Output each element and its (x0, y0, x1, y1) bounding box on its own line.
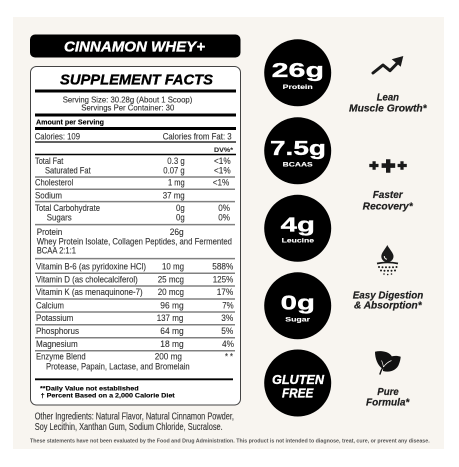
label: easy digestion and absorption: Easy Digestion (353, 290, 423, 301)
label: easy digestion and absorption: & Absorption* (354, 301, 423, 312)
vitamin D row: Vitamin D (as cholecalciferol) (36, 273, 138, 284)
potassium row (36, 312, 233, 323)
disclaimer: These statements have not been evaluated by the Food and Drug Administration. This product is not intended to diagnose, treat, cure, or prevent any disease. (30, 438, 430, 444)
label: easy digestion and absorption (353, 290, 423, 312)
potassium row: 137 mg (157, 312, 183, 323)
badge: 0g sugar: 0g (281, 291, 315, 314)
other ingredients: Other Ingredients: Natural Flavor, Natural Cinnamon Powder, (35, 411, 234, 422)
label: lean muscle growth (349, 93, 428, 114)
cholesterol row: Cholesterol (35, 177, 73, 188)
title bar (30, 34, 240, 58)
calcium row: Calcium (36, 300, 64, 311)
badge: 7.5g BCAAs: BCAAS (283, 162, 313, 169)
title bar: CINNAMON WHEY+ (64, 40, 205, 56)
badge: gluten free: FREE (282, 386, 314, 401)
calories row: Calories from Fat: 3 (163, 130, 232, 141)
fat rows: <1% (214, 155, 231, 166)
phosphorus row: 64 mg (160, 325, 184, 336)
vitamin B-6 row (36, 261, 233, 272)
phosphorus row: 5% (221, 325, 233, 336)
footnotes: † Percent Based on a 2,000 Calorie Diet (41, 392, 176, 399)
carbohydrate rows: Sugars (47, 212, 72, 223)
cholesterol row: 1 mg (168, 177, 185, 188)
label: pure formula: Pure (377, 387, 399, 398)
vitamin K row: Vitamin K (as menaquinone-7) (36, 286, 143, 297)
icon: water drop absorbing (377, 245, 398, 275)
heading: supplement facts: SUPPLEMENT FACTS (60, 72, 213, 88)
calcium row: 96 mg (160, 300, 184, 311)
badge: 4g leucine (264, 195, 331, 262)
icon: three plus signs (369, 159, 407, 173)
icon: rising arrow (373, 56, 403, 73)
magnesium row: Magnesium (36, 338, 78, 349)
label: faster recovery (363, 190, 414, 212)
serving information: Servings Per Container: 30 (81, 104, 175, 113)
potassium row: 3% (221, 312, 233, 323)
sodium row: 37 mg (163, 189, 185, 200)
badge: gluten free (264, 350, 331, 416)
daily value header: DV%* (214, 147, 234, 154)
other ingredients (35, 411, 234, 433)
panel: supplement facts (30, 66, 240, 405)
icon: leaves (375, 351, 401, 374)
enzyme blend row (36, 351, 233, 371)
vitamin K row: 17% (217, 286, 233, 297)
vitamin B-6 row: 10 mg (162, 261, 184, 272)
fat rows: 0.07 g (163, 164, 185, 175)
label: pure formula (366, 387, 410, 409)
label: lean muscle growth: Muscle Growth* (349, 103, 428, 114)
carbohydrate rows (35, 202, 230, 223)
label: lean muscle growth: Lean (377, 93, 399, 104)
vitamin D row: 25 mcg (158, 273, 184, 284)
serving information: Serving Size: 30.28g (About 1 Scoop) (63, 95, 193, 104)
vitamin K row: 20 mcg (158, 286, 184, 297)
carbohydrate rows: 0% (218, 212, 230, 223)
carbohydrate rows: 0g (176, 212, 185, 223)
magnesium row: 4% (222, 338, 234, 349)
badge: 0g sugar: Sugar (285, 316, 311, 323)
calories row (35, 130, 232, 141)
fat rows: 0.3 g (167, 155, 185, 166)
carbohydrate rows: 0g (176, 202, 185, 213)
sodium row: Sodium (35, 189, 62, 200)
carbohydrate rows: Total Carbohydrate (35, 202, 100, 213)
badge: 7.5g BCAAs: 7.5g (270, 137, 326, 160)
magnesium row (36, 338, 234, 349)
protein row (37, 226, 232, 256)
vitamin D row: 125% (213, 273, 233, 284)
badge: 0g sugar (264, 272, 331, 339)
badge: 4g leucine: 4g (281, 214, 315, 237)
amount per serving: Amount per Serving (36, 117, 104, 126)
cholesterol row (35, 177, 229, 188)
enzyme blend row: 200 mg (155, 351, 182, 362)
vitamin D row (36, 273, 233, 284)
other ingredients: Soy Lecithin, Xanthan Gum, Sodium Chloride, Sucralose. (35, 422, 223, 433)
badge: 26g protein: Protein (283, 84, 313, 91)
fat rows (35, 155, 231, 175)
badge: 7.5g BCAAs (264, 117, 331, 184)
vitamin K row (36, 286, 233, 297)
calcium row: 7% (222, 300, 234, 311)
enzyme blend row: Protease, Papain, Lactase, and Bromelain (46, 360, 190, 371)
fat rows: <1% (214, 164, 231, 175)
badge: 26g protein (264, 39, 331, 106)
potassium row: Potassium (36, 312, 73, 323)
carbohydrate rows: 0% (218, 202, 230, 213)
calories row: Calories: 109 (35, 130, 80, 141)
phosphorus row (36, 325, 233, 336)
phosphorus row: Phosphorus (36, 325, 79, 336)
enzyme blend row: * * (225, 351, 233, 362)
protein row: 26g (170, 226, 184, 237)
fat rows: Saturated Fat (45, 164, 91, 175)
badge: 26g protein: 26g (272, 59, 324, 82)
cholesterol row: <1% (213, 177, 229, 188)
enzyme blend row: Enzyme Blend (36, 351, 86, 362)
badge: 4g leucine: Leucine (282, 237, 315, 244)
serving information (63, 95, 193, 113)
protein row: Whey Protein Isolate, Collagen Peptides, and Fermented (37, 235, 232, 246)
magnesium row: 18 mg (160, 338, 184, 349)
protein row: Protein (37, 226, 62, 237)
sodium row (35, 189, 185, 200)
label: faster recovery: Recovery* (363, 201, 414, 212)
protein row: BCAA 2:1:1 (37, 245, 76, 256)
calcium row (36, 300, 234, 311)
badge: gluten free: GLUTEN (272, 372, 325, 387)
fat rows: Total Fat (35, 155, 64, 166)
vitamin B-6 row: 588% (212, 261, 233, 272)
footnotes (40, 385, 176, 399)
vitamin B-6 row: Vitamin B-6 (as pyridoxine HCl) (36, 261, 146, 272)
label: faster recovery: Faster (373, 190, 404, 201)
footnotes: **Daily Value not established (40, 385, 139, 392)
label: pure formula: Formula* (366, 398, 410, 409)
